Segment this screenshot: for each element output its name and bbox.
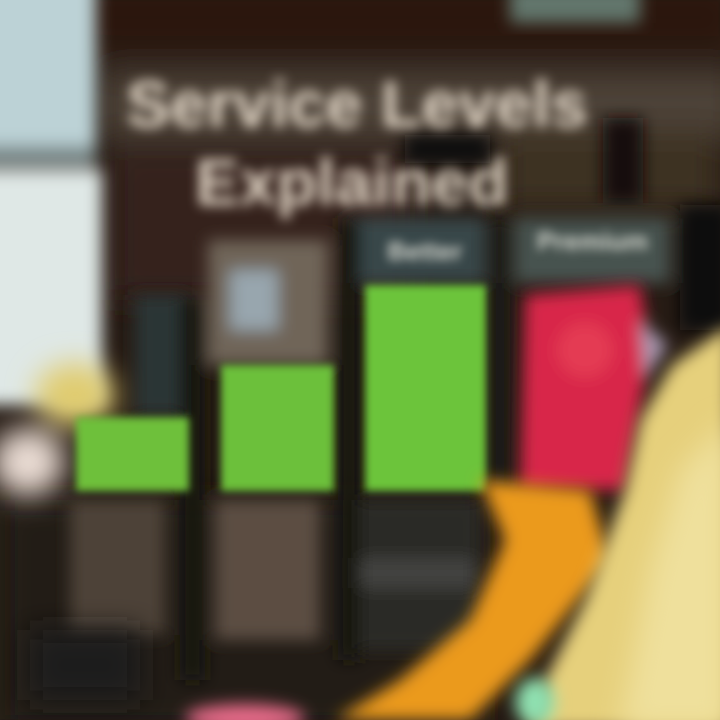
green bar 2	[221, 365, 334, 491]
top-right sign	[510, 0, 640, 23]
green bar 1	[76, 417, 189, 491]
green bar 3	[365, 285, 486, 491]
board columns	[70, 118, 720, 680]
column caption: middle tier: Better	[387, 236, 463, 266]
orange sleeve	[335, 480, 610, 720]
title: second line: Explained	[195, 145, 509, 219]
title: first line: Service Levels	[126, 67, 588, 141]
bottom details	[185, 678, 555, 720]
left figure highlights	[0, 363, 140, 700]
red bar	[520, 285, 668, 490]
window	[0, 0, 102, 405]
yellow sleeve	[530, 325, 720, 720]
column caption: top tier: Premium	[537, 226, 648, 256]
